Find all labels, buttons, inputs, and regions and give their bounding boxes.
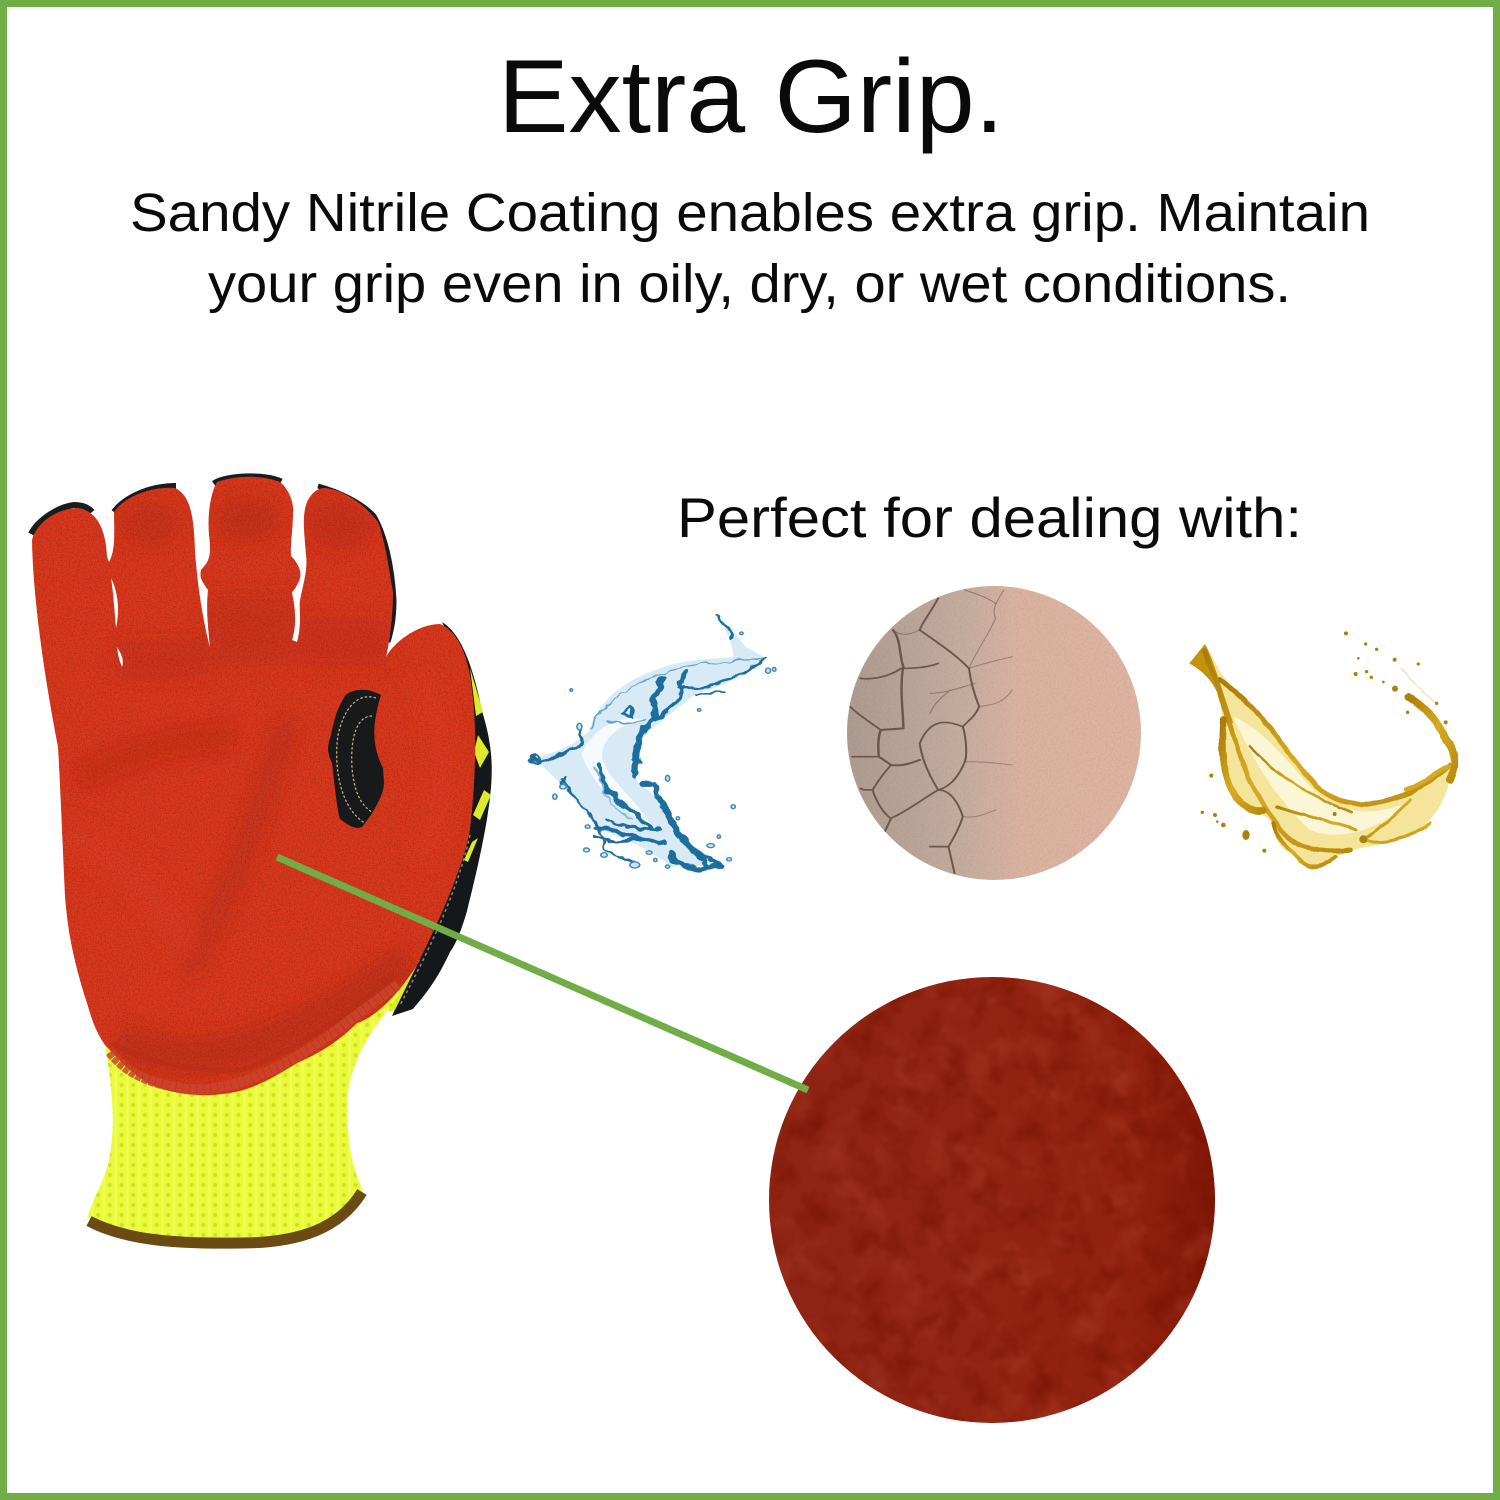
- oil strands: [1203, 650, 1455, 867]
- glove back armor: [392, 622, 492, 1016]
- water highlight: [582, 718, 651, 827]
- oil twist: [1189, 644, 1233, 723]
- cuff hem: [89, 1192, 362, 1243]
- description text: [130, 183, 1370, 314]
- green callout line: [277, 857, 808, 1090]
- oil inner glow: [1233, 717, 1413, 835]
- coating macro circle: [760, 970, 1230, 1430]
- finger gap slits: [111, 578, 123, 667]
- description text: Sandy Nitrile Coating enables extra grip. Maintain: [130, 183, 1370, 243]
- description text: your grip even in oily, dry, or wet conditions.: [208, 254, 1291, 314]
- dry cracked skin image: [847, 586, 1141, 880]
- water body: [531, 615, 766, 867]
- water splash image: [531, 615, 776, 870]
- water dark streams: [531, 616, 766, 870]
- macro light mottling: [760, 970, 1230, 1430]
- title: Extra Grip.: [498, 39, 1004, 155]
- glove illustration: [25, 470, 492, 1248]
- skin cracks: [850, 590, 1012, 873]
- thumb crotch impact pad: [328, 690, 384, 828]
- glove back yellow patches: [388, 668, 491, 1012]
- finger and palm shadows: [60, 498, 442, 1056]
- sandy grain: [25, 470, 485, 1100]
- cuff: [88, 960, 420, 1248]
- red nitrile palm and fingers: [32, 477, 475, 1095]
- oil splash image: [1189, 631, 1455, 867]
- oil sheet: [1190, 644, 1450, 866]
- palm shading and texture: [25, 470, 485, 1100]
- finger tip edging: [31, 477, 394, 642]
- subheading: Perfect for dealing with:: [677, 486, 1302, 549]
- oil droplets: [1201, 631, 1448, 853]
- skin base: [847, 586, 1141, 880]
- coating edge rim: [110, 975, 398, 1089]
- skin grain: [858, 586, 1140, 879]
- macro base: [760, 970, 1230, 1430]
- armor stitching: [400, 835, 470, 1005]
- macro dark mottling: [760, 970, 1230, 1430]
- water droplets: [553, 632, 776, 868]
